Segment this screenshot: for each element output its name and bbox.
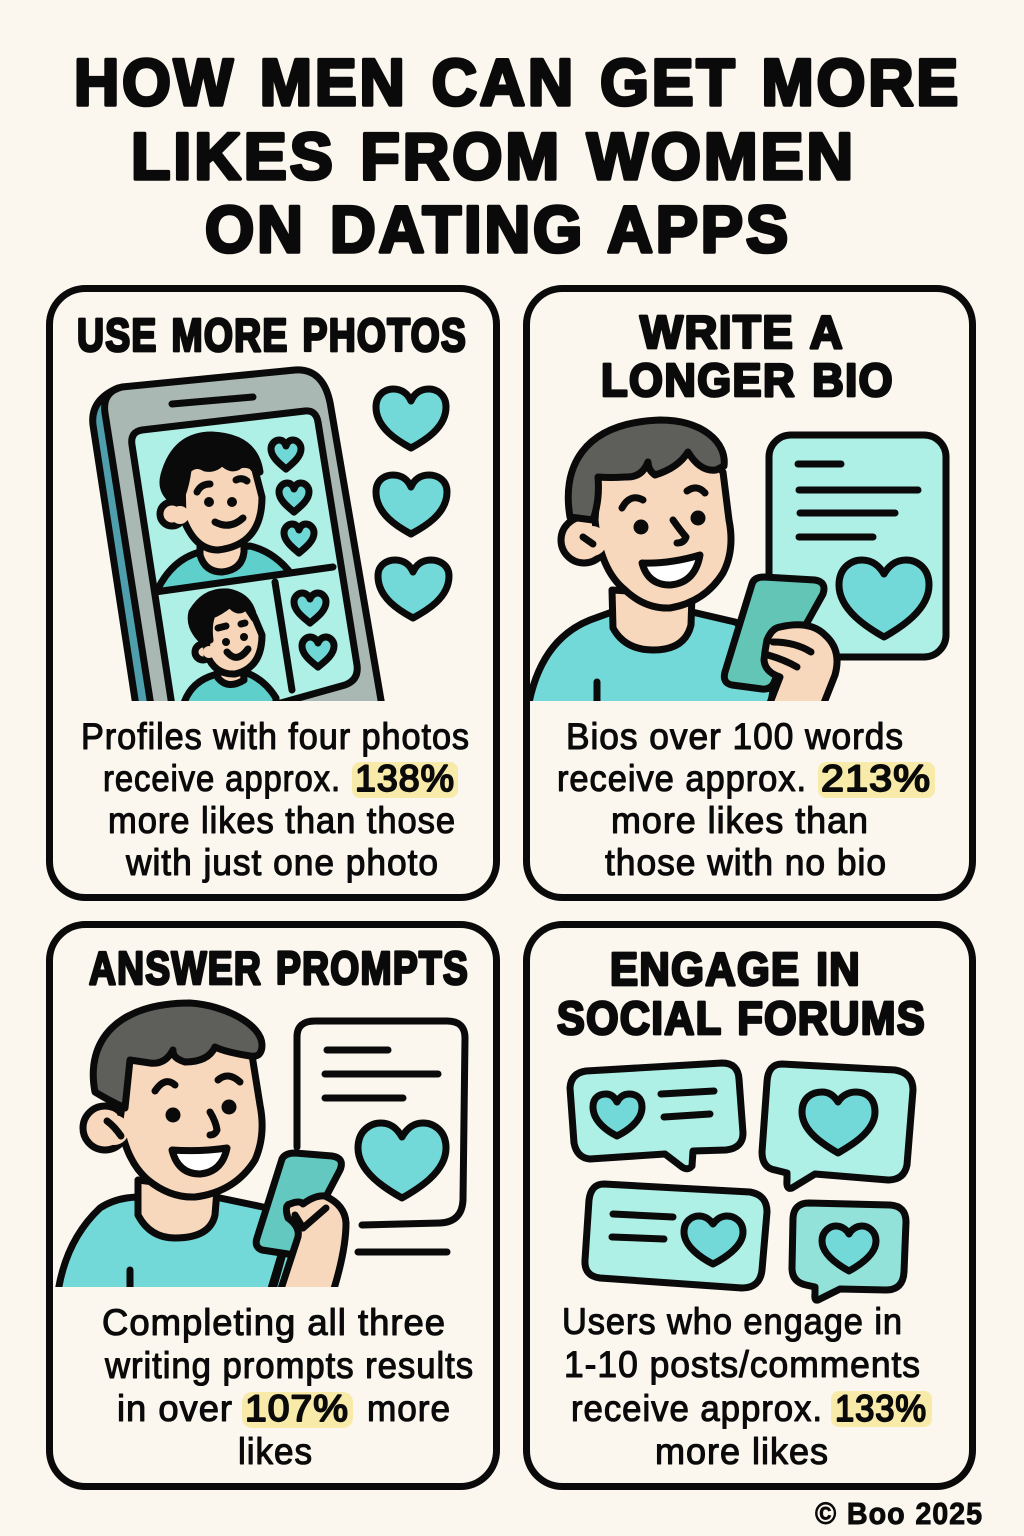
heading: write a longer bio: WRITE A: [640, 306, 844, 358]
illustration: man with phone and bio: [528, 420, 946, 708]
text: prompts statistic: [102, 1302, 474, 1472]
heading: use more photos: USE MORE PHOTOS: [77, 309, 467, 361]
text: bio statistic: Bios over 100 words: [566, 716, 904, 757]
text: photos statistic: receive approx.: [103, 758, 341, 799]
text: prompts statistic: likes: [238, 1431, 313, 1472]
text: bio statistic: [557, 716, 935, 883]
text: forums statistic: 133%: [835, 1388, 927, 1429]
text: prompts statistic: in over: [117, 1388, 233, 1429]
title: LIKES FROM WOMEN: [131, 119, 856, 193]
text: bio statistic: 213%: [821, 758, 931, 799]
text: photos statistic: more likes than those: [108, 800, 456, 841]
panel: use more photos: [50, 288, 496, 898]
heading: engage in social forums: [557, 943, 926, 1044]
text: photos statistic: [81, 716, 470, 883]
copyright: © Boo 2025: [815, 1496, 983, 1531]
title: HOW MEN CAN GET MORE: [74, 45, 961, 119]
text: forums statistic: [562, 1301, 932, 1472]
title: ON DATING APPS: [205, 192, 791, 266]
illustration: phone with profile photos: [93, 370, 382, 706]
text: bio statistic: those with no bio: [605, 842, 887, 883]
panel: engage in social forums: [526, 924, 972, 1486]
icon: speech bubble with heart: [762, 1064, 913, 1188]
text: prompts statistic: 107%: [245, 1388, 349, 1429]
panel: write a longer bio: [526, 288, 972, 898]
text: photos statistic: 138%: [355, 758, 455, 799]
text: photos statistic: Profiles with four photos: [81, 716, 470, 757]
text: bio statistic: more likes than: [611, 800, 869, 841]
text: photos statistic: with just one photo: [125, 842, 439, 883]
heading: engage in social forums: SOCIAL FORUMS: [557, 992, 926, 1044]
text: forums statistic: Users who engage in: [562, 1301, 903, 1342]
text: prompts statistic: Completing all three: [102, 1302, 446, 1343]
icon: wide speech bubble with lines and heart: [585, 1184, 767, 1288]
illustration: man answering prompts: [58, 1003, 465, 1300]
heading: engage in social forums: ENGAGE IN: [610, 943, 861, 995]
heading: write a longer bio: LONGER BIO: [601, 354, 894, 406]
icon: small speech bubble with heart: [792, 1203, 906, 1300]
title: [74, 45, 961, 266]
text: bio statistic: receive approx.: [557, 758, 807, 799]
heading: answer prompts: ANSWER PROMPTS: [89, 942, 469, 994]
icon: heart 2: [376, 475, 447, 534]
text: forums statistic: more likes: [655, 1431, 829, 1472]
icon: heart 3: [378, 560, 449, 618]
icon: heart 1: [376, 389, 446, 448]
panel: answer prompts: [50, 924, 496, 1486]
text: prompts statistic: more: [367, 1388, 451, 1429]
text: prompts statistic: writing prompts results: [104, 1345, 474, 1386]
icon: speech bubble with heart and lines: [570, 1063, 743, 1169]
text: forums statistic: receive approx.: [571, 1388, 823, 1429]
text: forums statistic: 1-10 posts/comments: [564, 1344, 921, 1385]
heading: write a longer bio: [601, 306, 894, 406]
